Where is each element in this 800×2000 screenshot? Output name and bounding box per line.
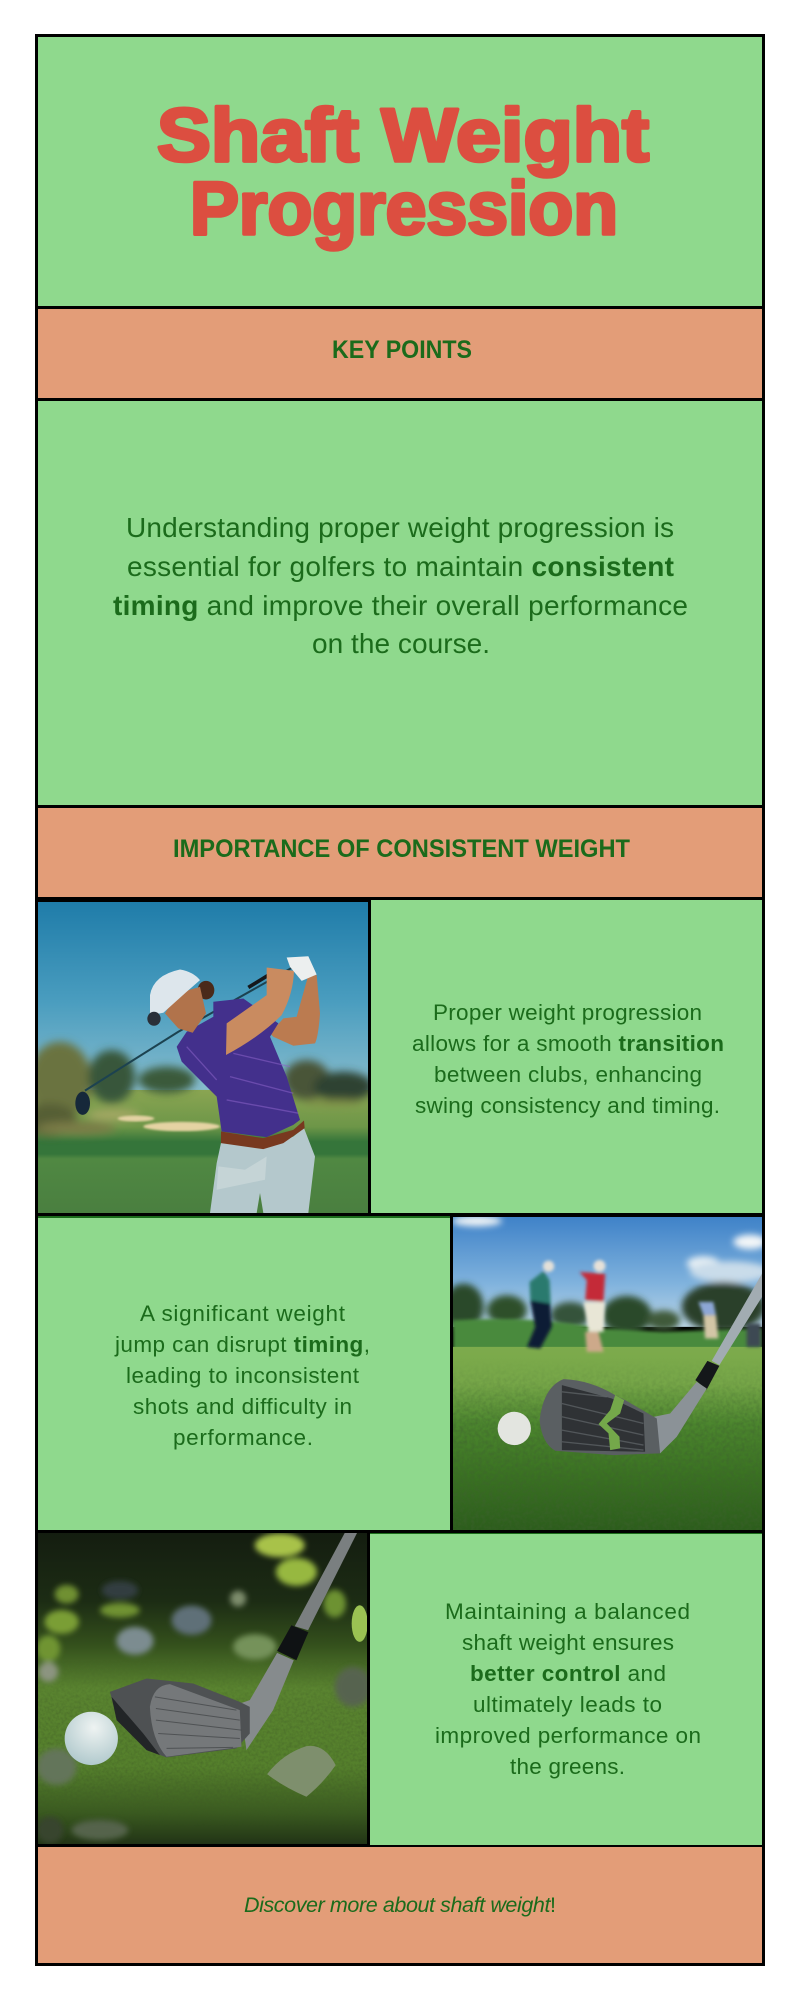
- text: introduction: essential for golfers to maintain consistent: [127, 551, 674, 582]
- text: disrupted timing: performance.: [173, 1425, 313, 1450]
- panel: footer: [38, 1847, 762, 1963]
- background golfers: [527, 1260, 761, 1352]
- panel: smooth transition: [371, 900, 762, 1214]
- title: [157, 93, 650, 252]
- text: smooth transition: between clubs, enhancing: [434, 1062, 702, 1087]
- panel: image divider one: [368, 897, 371, 1216]
- panel: divider row two: [38, 1530, 762, 1533]
- photo: iron and ball among leaves: [38, 1533, 367, 1844]
- text: better control: better control and: [470, 1661, 666, 1686]
- golfer: [147, 956, 320, 1213]
- text: disrupted timing: [114, 1301, 370, 1450]
- text: better control: [435, 1599, 701, 1779]
- title: Shaft Weight: [157, 93, 649, 177]
- panel: divider column two: [450, 1214, 453, 1532]
- panel: introduction: [38, 401, 762, 805]
- title: Progression: [190, 166, 618, 250]
- panel: key points heading: [38, 309, 762, 398]
- text: better control: shaft weight ensures: [462, 1630, 674, 1655]
- panel: title: [38, 37, 762, 306]
- text: smooth transition: allows for a smooth transition: [412, 1031, 724, 1056]
- panel: better control: [370, 1533, 762, 1845]
- text: introduction: on the course.: [312, 628, 490, 659]
- golf ball: [65, 1712, 118, 1765]
- photo: cracked iron on the fairway: [453, 1217, 762, 1530]
- photo: golfer mid swing: [38, 902, 368, 1213]
- iron club: [110, 1533, 357, 1757]
- text: better control: the greens.: [510, 1754, 625, 1779]
- text: smooth transition: [412, 1000, 724, 1118]
- text: better control: ultimately leads to: [473, 1692, 662, 1717]
- text: better control: improved performance on: [435, 1723, 701, 1748]
- text: footer call to action: Discover more about shaft weight!: [244, 1893, 556, 1917]
- panel: divider column one: [367, 1530, 370, 1847]
- text: disrupted timing: A significant weight: [140, 1301, 346, 1326]
- golf club: [75, 959, 308, 1115]
- panel: divider row one: [38, 1213, 762, 1216]
- panel: disrupted timing: [38, 1216, 450, 1530]
- fallen leaf: [267, 1746, 336, 1797]
- text: better control: Maintaining a balanced: [445, 1599, 690, 1624]
- cracked iron head: [540, 1379, 660, 1455]
- text: disrupted timing: shots and difficulty in: [133, 1394, 352, 1419]
- text: introduction: timing and improve their overall performance: [113, 590, 688, 621]
- text: disrupted timing: leading to inconsistent: [126, 1363, 360, 1388]
- text: introduction: [113, 512, 688, 659]
- golf ball: [498, 1412, 531, 1445]
- iron shaft: [654, 1274, 762, 1453]
- text: introduction: Understanding proper weight progression is: [126, 512, 674, 543]
- text: smooth transition: swing consistency and timing.: [415, 1093, 720, 1118]
- panel: importance heading: [38, 808, 762, 897]
- text: smooth transition: Proper weight progression: [433, 1000, 702, 1025]
- heading: key points: KEY POINTS: [332, 336, 472, 364]
- text: disrupted timing: jump can disrupt timing,: [114, 1332, 370, 1357]
